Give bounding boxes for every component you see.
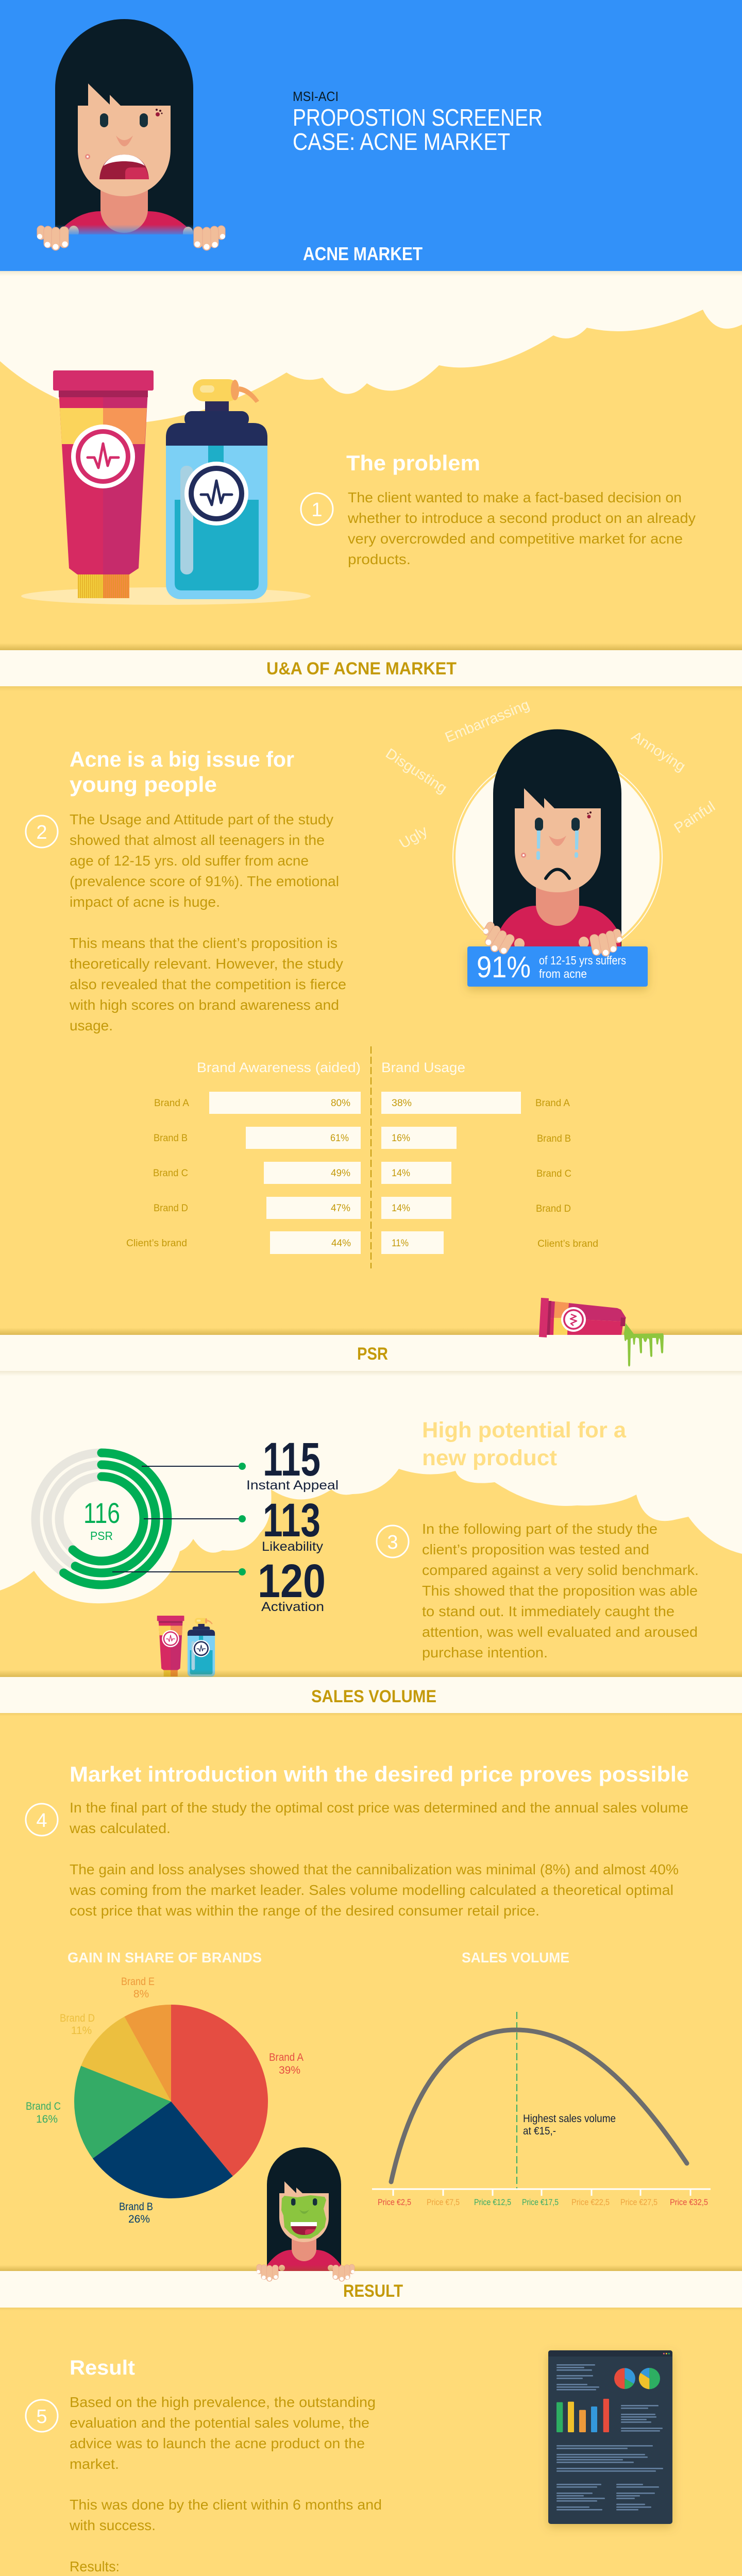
title block: PROPOSTION SCREENER (293, 104, 543, 131)
sales text: In the final part of the study the optimal cost price was determined and the annual sales volume (70, 1800, 688, 1816)
title block: CASE: ACNE MARKET (293, 128, 510, 155)
chart title: gain in share: GAIN IN SHARE OF BRANDS (68, 1950, 262, 1965)
pie chart: 11% (71, 2025, 92, 2037)
chart: brand awareness and usage: 16% (392, 1133, 410, 1144)
score: instant appeal: Instant Appeal (246, 1478, 339, 1493)
panel: the problem (0, 310, 742, 650)
PSR text: to stand out. It immediately caught the (422, 1603, 674, 1619)
chart: brand awareness and usage: Brand A (535, 1098, 570, 1109)
emotion words: Ugly (396, 823, 430, 852)
U&A text: impact of acne is huge. (70, 894, 220, 910)
section band: sales volume: SALES VOLUME (311, 1687, 436, 1706)
score: activation: 120 (258, 1555, 326, 1607)
chart: brand awareness and usage: 49% (331, 1168, 350, 1179)
U&A text: showed that almost all teenagers in the (70, 832, 325, 848)
emotion words: Painful (671, 798, 718, 836)
result text (69, 2394, 382, 2574)
icon: girl hands on band (37, 226, 225, 250)
icon: pump bottle (166, 379, 267, 599)
illustration: crying girl (452, 729, 663, 987)
illustration: girl with face mask (267, 2147, 341, 2272)
U&A text: age of 12-15 yrs. old suffer from acne (70, 853, 309, 869)
chart: brand awareness and usage (126, 1046, 598, 1268)
title block (293, 89, 543, 155)
step number 2: 2 (36, 822, 47, 843)
icon: tilted tube dripping slime (539, 1298, 664, 1366)
section band: U&A: U&A OF ACNE MARKET (266, 659, 457, 679)
ground shadow (21, 587, 311, 605)
chart: brand awareness and usage: Brand B (154, 1133, 188, 1144)
pie chart: Brand D (60, 2012, 95, 2024)
score: instant appeal: 115 (263, 1433, 321, 1486)
PSR text: purchase intention. (422, 1645, 548, 1660)
problem text: The client wanted to make a fact-based decision on (348, 489, 682, 505)
PSR text: In the following part of the study the (422, 1521, 657, 1537)
U&A text: with high scores on brand awareness and (69, 997, 339, 1013)
PSR text: compared against a very solid benchmark. (422, 1562, 699, 1578)
heading: big issue (70, 747, 294, 796)
chart: brand awareness and usage: 14% (392, 1168, 410, 1179)
chart: brand awareness and usage: 11% (392, 1238, 409, 1249)
U&A text: usage. (70, 1018, 113, 1033)
panel: U&A (0, 686, 742, 1335)
U&A text: The Usage and Attitude part of the study (70, 811, 333, 827)
emotion words (383, 696, 718, 852)
heading: high potential (422, 1418, 627, 1470)
pie chart: 16% (36, 2113, 58, 2125)
pie chart: Brand C (26, 2100, 61, 2112)
sales text: was calculated. (69, 1820, 171, 1836)
chart: brand awareness and usage: Brand D (536, 1204, 571, 1214)
emotion words: Disgusting (383, 745, 450, 796)
problem text: whether to introduce a second product on an already (347, 510, 696, 526)
line chart: sales volume: Price €32,5 (670, 2197, 708, 2207)
chart: brand awareness and usage: 47% (331, 1203, 350, 1214)
chart title: sales volume: SALES VOLUME (462, 1950, 569, 1965)
heading: big issue: young people (70, 772, 217, 796)
line chart: sales volume: at €15,- (523, 2125, 556, 2137)
pie chart: 39% (279, 2064, 300, 2076)
result text: evaluation and the potential sales volume, the (70, 2415, 369, 2431)
score: likeability: Likeability (262, 1539, 324, 1554)
chart: PSR rings (36, 1453, 167, 1585)
chart: brand awareness and usage: Brand A (154, 1098, 189, 1109)
cloud background (0, 1469, 742, 1677)
problem text (347, 489, 696, 567)
pie chart: Brand E (121, 1976, 155, 1988)
score: activation: Activation (261, 1600, 324, 1614)
line chart: sales volume: Price €17,5 (522, 2197, 559, 2207)
panel: result (0, 2308, 742, 2576)
section band: acne market (0, 234, 742, 271)
line chart: sales volume: Price €7,5 (427, 2197, 460, 2207)
chart: brand awareness and usage: 61% (330, 1133, 349, 1144)
section band: sales volume (0, 1670, 742, 1713)
chart: brand awareness and usage: Brand B (537, 1133, 571, 1144)
result text: advice was to launch the acne product on the (70, 2435, 365, 2451)
header panel (0, 0, 742, 271)
PSR text (422, 1521, 699, 1660)
PSR text: attention, was well evaluated and aroused (422, 1624, 698, 1640)
line chart: sales volume: Price €2,5 (378, 2197, 411, 2207)
line chart: sales volume: Price €27,5 (620, 2197, 657, 2207)
heading: high potential: new product (422, 1446, 557, 1470)
chart: brand awareness and usage: 38% (392, 1098, 412, 1109)
pie chart: Brand B (119, 2201, 153, 2213)
chart: brand awareness and usage: Brand C (536, 1168, 571, 1179)
problem text: products. (348, 551, 411, 567)
step number 5 (26, 2400, 58, 2432)
heading: result: Result (70, 2357, 135, 2379)
chart: brand awareness and usage: 44% (331, 1238, 351, 1249)
callout: 91%: from acne (539, 967, 587, 980)
heading: high potential: High potential for a (422, 1418, 627, 1443)
section band: acne market: ACNE MARKET (303, 243, 423, 264)
section band: result (0, 2265, 742, 2308)
icon: cream tube (53, 370, 154, 598)
step number 3: 3 (387, 1532, 398, 1553)
illustration: shocked girl (55, 19, 193, 239)
PSR text: client’s proposition was tested and (422, 1541, 649, 1557)
line chart: sales volume: Price €22,5 (571, 2197, 610, 2207)
pie chart: Brand A (269, 2052, 303, 2063)
chart: brand awareness and usage: 14% (392, 1203, 410, 1214)
step number 3 (377, 1526, 409, 1557)
chart: brand awareness and usage: 80% (331, 1098, 350, 1109)
chart: PSR rings: PSR (90, 1529, 113, 1543)
score connectors (112, 1463, 246, 1575)
step number 5: 5 (36, 2406, 47, 2428)
icon: girl hands on result band (257, 2264, 355, 2281)
callout: 91%: 91% (477, 951, 531, 984)
emotion words: Embarrassing (443, 696, 532, 745)
step number 2 (26, 816, 58, 848)
cloud background (0, 310, 742, 650)
pie chart: 26% (128, 2213, 150, 2225)
result text: Results: (70, 2558, 120, 2574)
chart: brand awareness and usage: Client’s brand (537, 1239, 598, 1249)
line chart: sales volume: Highest sales volume (523, 2113, 616, 2125)
section band: PSR: PSR (357, 1344, 388, 1364)
result text: market. (70, 2456, 119, 2472)
U&A text: (prevalence score of 91%). The emotional (70, 873, 339, 889)
pie chart (26, 1976, 303, 2225)
U&A text: This means that the client’s proposition is (70, 935, 338, 951)
result text: This was done by the client within 6 months and (70, 2497, 382, 2513)
sales text: cost price that was within the range of the desired consumer retail price. (70, 1903, 539, 1919)
line chart: sales volume: Price €12,5 (474, 2197, 511, 2207)
heading: big issue: Acne is a big issue for (70, 747, 294, 771)
chart: brand awareness and usage: Client’s brand (126, 1238, 187, 1249)
chart: brand awareness and usage: Brand C (153, 1168, 188, 1179)
score: likeability: 113 (263, 1494, 321, 1547)
title block: MSI-ACI (293, 89, 339, 104)
result text: Based on the high prevalence, the outstanding (70, 2394, 376, 2410)
U&A text: also revealed that the competition is fierce (70, 976, 346, 992)
chart: brand awareness and usage: Brand Awareness (aided) (197, 1060, 361, 1075)
step number 4: 4 (36, 1810, 47, 1832)
heading: market introduction: Market introduction with the desired price proves possible (70, 1762, 689, 1786)
step number 1: 1 (311, 499, 323, 521)
sales text: was coming from the market leader. Sales volume modelling calculated a theoretical optimal (69, 1882, 673, 1898)
result text: with success. (69, 2517, 156, 2533)
emotion words: Annoying (629, 728, 688, 774)
illustration: report document (548, 2350, 672, 2524)
step number 1 (301, 493, 333, 525)
problem text: very overcrowded and competitive market for acne (348, 531, 683, 547)
chart: brand awareness and usage: Brand Usage (381, 1060, 465, 1075)
callout: 91%: of 12-15 yrs suffers (539, 954, 626, 967)
panel: PSR (0, 1418, 742, 1677)
sales text (69, 1800, 688, 1919)
line chart: sales volume (372, 2012, 711, 2207)
U&A text: theoretically relevant. However, the study (70, 956, 343, 972)
heading: the problem: The problem (346, 451, 480, 475)
section band: U&A (0, 643, 742, 686)
panel: sales volume (0, 1713, 742, 2272)
icon: small products (157, 1616, 215, 1677)
sales text: The gain and loss analyses showed that the cannibalization was minimal (8%) and almost 40% (70, 1861, 679, 1877)
chart: brand awareness and usage: Brand D (154, 1203, 188, 1214)
section band: result: RESULT (343, 2281, 403, 2301)
PSR text: This showed that the proposition was able (422, 1583, 698, 1599)
section band: PSR (0, 1328, 742, 1376)
chart: PSR rings: 116 (83, 1497, 120, 1529)
pie chart: 8% (133, 1988, 149, 2000)
callout: 91% (467, 946, 648, 987)
U&A text (69, 811, 346, 1033)
step number 4 (26, 1804, 58, 1836)
